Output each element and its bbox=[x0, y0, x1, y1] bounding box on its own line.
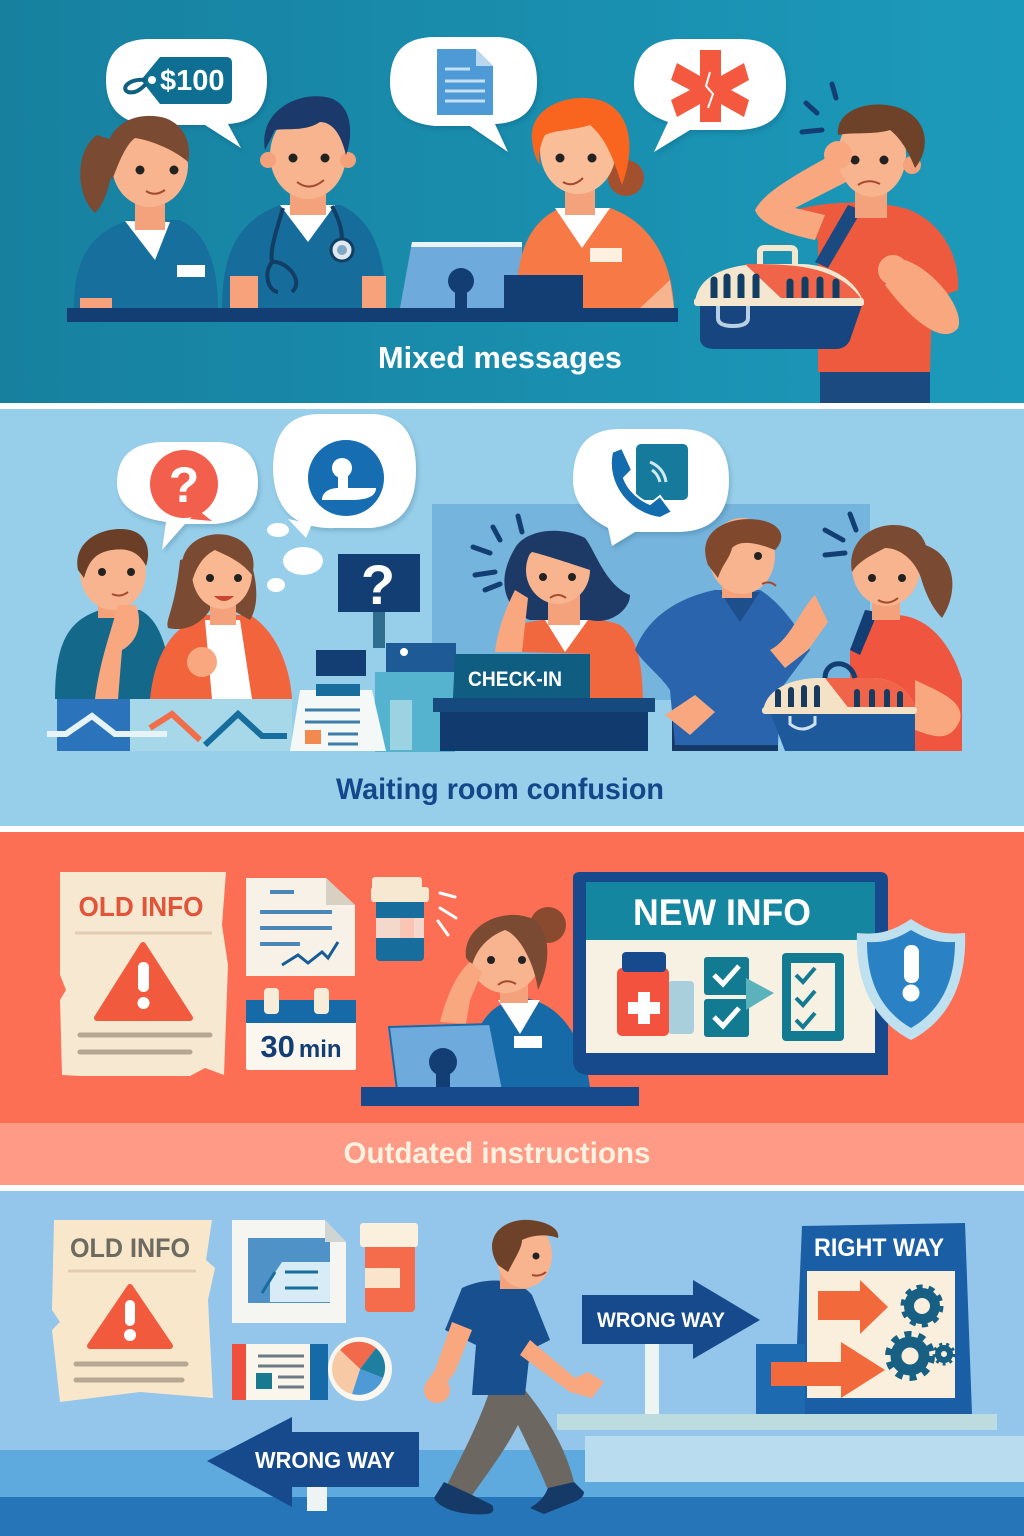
sign: wrong way right: WRONG WAY bbox=[597, 1309, 725, 1332]
check-in desk: CHECK-IN bbox=[468, 668, 562, 691]
counter chart bbox=[47, 699, 292, 751]
question sign: ? bbox=[361, 553, 395, 616]
person: man in blue shirt bbox=[635, 518, 828, 751]
document bbox=[232, 1220, 346, 1323]
person: orange-haired receptionist bbox=[516, 98, 674, 308]
person: nurse with ponytail bbox=[74, 116, 218, 308]
speech bubble: person icon bbox=[273, 414, 416, 538]
icon: checklist bbox=[782, 953, 844, 1041]
icon: pie chart bbox=[328, 1337, 392, 1401]
heading: waiting room confusion: Waiting room confusion bbox=[336, 773, 664, 806]
back wall bbox=[432, 504, 870, 700]
heading: outdated instructions: Outdated instructions bbox=[344, 1137, 650, 1170]
icon: first aid bottle bbox=[617, 952, 694, 1036]
thought bubbles bbox=[267, 523, 323, 592]
person: man thinking bbox=[55, 529, 172, 699]
arrows bbox=[771, 1280, 888, 1398]
panel: mixed messages bbox=[0, 0, 1024, 403]
sign: wrong way left: WRONG WAY bbox=[255, 1447, 395, 1473]
calendar: 30 min: 30min bbox=[260, 1029, 342, 1064]
check-in desk bbox=[433, 654, 655, 751]
medicine bottle bbox=[371, 877, 456, 961]
document with chart bbox=[246, 878, 355, 976]
screen: new info bbox=[573, 872, 888, 1075]
person: confused owner bbox=[755, 84, 959, 403]
panel: waiting room confusion bbox=[0, 409, 1024, 826]
icon: warning shield bbox=[857, 919, 965, 1040]
cash register bbox=[316, 643, 456, 752]
pet carrier bbox=[694, 248, 864, 349]
speech bubble: phone bbox=[573, 429, 729, 546]
screen: new info: NEW INFO bbox=[633, 892, 811, 933]
speech bubble: document bbox=[390, 37, 537, 152]
speech bubble: price tag: $100 bbox=[160, 65, 225, 97]
person: stressed receptionist bbox=[473, 516, 643, 698]
calendar: 30 min bbox=[246, 988, 356, 1070]
person: walking man bbox=[424, 1220, 604, 1514]
computer monitor bbox=[400, 242, 522, 309]
desk bbox=[67, 308, 678, 322]
desk bbox=[361, 1087, 639, 1106]
person: woman with carrier bbox=[825, 514, 962, 751]
sign: wrong way left bbox=[207, 1417, 419, 1511]
keyboard block bbox=[504, 275, 583, 310]
question sign bbox=[338, 553, 420, 648]
icon: checklist arrow bbox=[704, 957, 774, 1037]
person: worried staff bbox=[440, 907, 590, 1088]
sign: wrong way right bbox=[582, 1280, 760, 1414]
icon: gears bbox=[888, 1287, 954, 1378]
speech bubble: question: ? bbox=[169, 457, 199, 513]
card with chart bbox=[232, 1344, 328, 1400]
heading: mixed messages: Mixed messages bbox=[378, 340, 622, 375]
person: woman in orange cardigan bbox=[150, 534, 292, 699]
notice: old info: OLD INFO bbox=[70, 1233, 190, 1263]
panel: wrong way bbox=[0, 1191, 1024, 1536]
notice: old info bbox=[60, 872, 228, 1076]
notice: old info bbox=[52, 1220, 215, 1402]
panel: outdated instructions bbox=[0, 832, 1024, 1185]
clipboard form bbox=[290, 684, 386, 751]
medicine bottle bbox=[360, 1223, 418, 1312]
platform bbox=[557, 1414, 1024, 1482]
pet carrier bbox=[762, 664, 917, 751]
speech bubble: medical star bbox=[634, 39, 786, 152]
board: right way bbox=[756, 1223, 972, 1414]
speech bubble: question bbox=[117, 442, 258, 550]
speech bubble: price tag bbox=[106, 39, 267, 148]
board: right way: RIGHT WAY bbox=[814, 1234, 944, 1262]
laptop bbox=[389, 1024, 503, 1090]
person: vet with stethoscope bbox=[222, 96, 386, 308]
notice: old info: OLD INFO bbox=[78, 891, 204, 922]
